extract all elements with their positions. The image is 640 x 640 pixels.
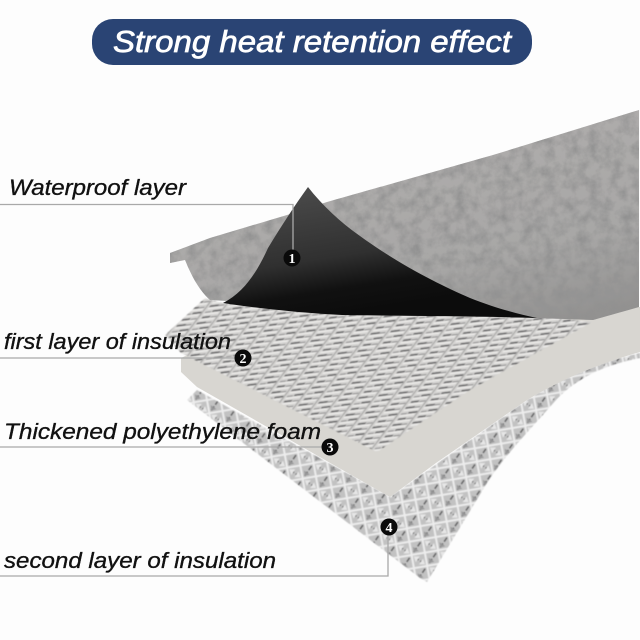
marker 1: 1 bbox=[288, 252, 296, 267]
first insulation layer bbox=[165, 298, 592, 452]
marker 1 bbox=[284, 250, 300, 267]
polyethylene foam layer bbox=[181, 305, 640, 497]
marker 4 bbox=[380, 518, 398, 536]
marker 4: 4 bbox=[386, 521, 392, 536]
title banner bbox=[92, 19, 532, 65]
black peeled underside bbox=[223, 187, 537, 318]
product: layered insulation material bbox=[165, 110, 640, 582]
marker 3 bbox=[322, 438, 338, 456]
label: thickened polyethylene foam: Thickened polyethylene foam bbox=[4, 419, 321, 444]
second insulation layer bbox=[187, 353, 640, 582]
label: second layer of insulation bbox=[0, 535, 388, 576]
label: waterproof layer bbox=[0, 175, 293, 250]
label: second layer of insulation: second layer of insulation bbox=[4, 548, 276, 573]
marker 2 bbox=[234, 350, 252, 367]
label: first layer of insulation: first layer of insulation bbox=[4, 329, 231, 354]
label: waterproof layer: Waterproof layer bbox=[9, 175, 188, 200]
marker 2: 2 bbox=[240, 352, 246, 367]
marker 3: 3 bbox=[326, 441, 334, 456]
gray waterproof fabric layer bbox=[170, 110, 639, 320]
title banner: Strong heat retention effect bbox=[113, 24, 512, 59]
